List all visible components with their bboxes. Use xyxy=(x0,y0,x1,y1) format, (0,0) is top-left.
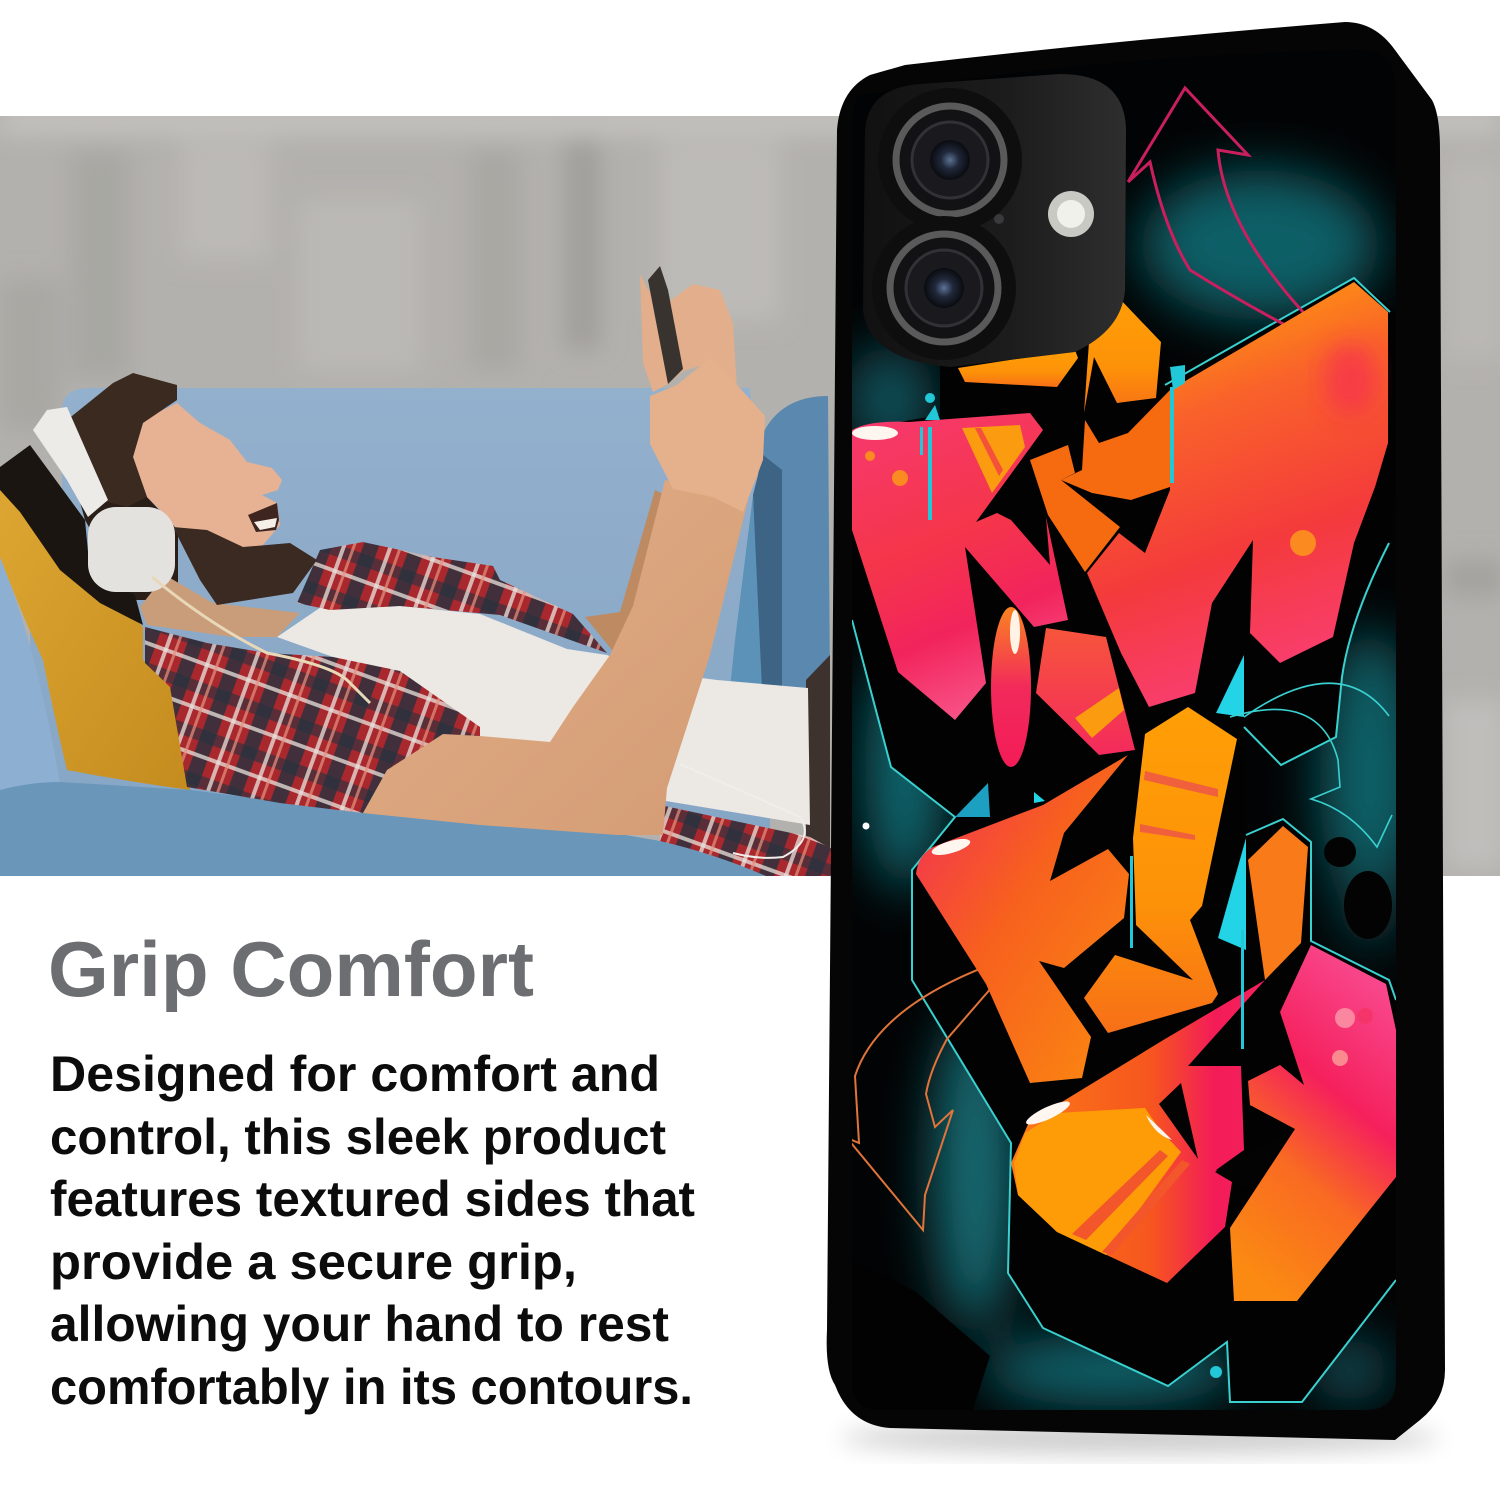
pink arrow line art xyxy=(1126,86,1304,324)
lower hand xyxy=(650,358,765,512)
description paragraph: provide a secure grip, xyxy=(50,1234,577,1290)
teeth xyxy=(254,518,277,530)
phone case xyxy=(827,22,1445,1454)
concrete wall xyxy=(0,112,1500,876)
soft shadow xyxy=(840,1422,1440,1454)
orange stripes on left M xyxy=(962,425,1025,493)
upper lens xyxy=(878,88,1022,232)
teal paint drips xyxy=(920,365,1244,1378)
description paragraph: Designed for comfort and xyxy=(50,1046,660,1102)
black letter mass xyxy=(852,278,1396,1402)
right small orange letter xyxy=(1248,826,1308,980)
oval highlight xyxy=(1010,610,1020,654)
graffiti centre orange xyxy=(1030,445,1120,572)
description paragraph: features textured sides that xyxy=(50,1171,695,1227)
bottom right pink letter xyxy=(1230,945,1396,1301)
black bottom-left ink blob xyxy=(906,1287,990,1410)
description paragraph: control, this sleek product xyxy=(50,1109,666,1165)
upper plaid collar xyxy=(297,542,607,653)
legs and belt xyxy=(806,655,830,850)
microphone dot xyxy=(994,214,1004,224)
case body xyxy=(827,22,1445,1440)
heading: Grip Comfort xyxy=(48,925,534,1013)
black ink details xyxy=(1159,837,1392,1190)
glossy highlights xyxy=(852,426,1172,1140)
description paragraph xyxy=(50,1046,695,1415)
printed artwork xyxy=(845,50,1420,1415)
thin teal right-side lines xyxy=(1230,683,1392,847)
smartphone xyxy=(648,266,683,384)
upper arm and forearm xyxy=(363,480,748,835)
graffiti letter: right M xyxy=(1087,282,1388,707)
bright teal patches xyxy=(955,655,1246,950)
beard xyxy=(173,527,317,605)
orange crescent on right M xyxy=(1061,390,1170,500)
paint splats xyxy=(865,451,1316,556)
lifestyle photo: man on sofa xyxy=(0,112,1500,880)
white paint dots xyxy=(848,816,870,830)
stripes on tall letter xyxy=(1140,771,1218,840)
bottom left letter xyxy=(1011,980,1265,1283)
headphones xyxy=(33,407,805,858)
tall orange letter xyxy=(1084,707,1237,1033)
description paragraph: comfortably in its contours. xyxy=(50,1359,693,1415)
flash xyxy=(1048,191,1094,237)
small letter block stripes xyxy=(1075,688,1124,738)
mouth xyxy=(248,503,279,532)
white t-shirt xyxy=(277,603,810,825)
head base shadow xyxy=(80,452,178,600)
man xyxy=(0,266,832,880)
lower-left letter xyxy=(916,755,1129,1083)
pink spray spot xyxy=(1324,342,1376,414)
yellow pillow xyxy=(0,485,190,790)
graffiti letter: left M xyxy=(852,413,1068,720)
plaid sleeve xyxy=(145,627,480,813)
orange arrow line art xyxy=(852,969,990,1232)
pink splats xyxy=(1332,1008,1373,1066)
lower lens xyxy=(872,216,1016,360)
lower shirt tail xyxy=(660,805,832,880)
description paragraph: allowing your hand to rest xyxy=(50,1296,669,1352)
red stripes on bottom letter xyxy=(1072,1150,1190,1255)
neck xyxy=(140,575,300,637)
small letter block xyxy=(1036,628,1135,755)
face xyxy=(133,403,282,560)
sofa xyxy=(0,388,830,830)
artwork backdrop with teal glow xyxy=(852,140,1396,1410)
hair xyxy=(67,373,177,507)
teal outlines of the letter mass xyxy=(852,278,1396,1402)
back of head shadow xyxy=(0,445,143,625)
sofa seat cushion xyxy=(0,782,775,880)
upper hand xyxy=(640,274,737,392)
camera module xyxy=(863,74,1126,367)
pink oval xyxy=(991,607,1031,767)
graffiti letter: top orange pieces xyxy=(958,298,1161,413)
rear forearm xyxy=(585,490,662,650)
yellow-orange fill of bottom left letter xyxy=(1014,1108,1181,1255)
